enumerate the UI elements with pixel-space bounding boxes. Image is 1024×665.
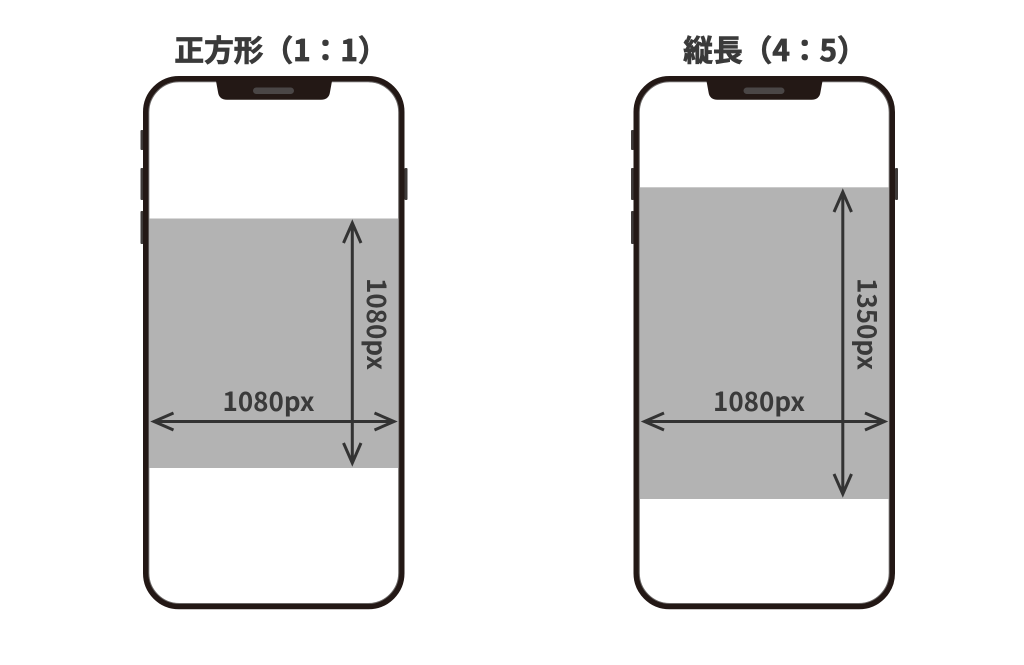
label: height 1080px: 1080px bbox=[359, 278, 396, 370]
arrow: vertical 1080px bbox=[344, 223, 361, 463]
arrow: horizontal 1080px bbox=[644, 413, 884, 430]
arrow: vertical 1350px bbox=[834, 192, 852, 494]
phone: square format bbox=[140, 79, 408, 606]
label: width 1080px: 1080px bbox=[713, 382, 805, 419]
label: width 1080px: 1080px bbox=[222, 382, 315, 419]
arrow: horizontal 1080px bbox=[154, 413, 394, 430]
label: height 1350px: 1350px bbox=[850, 278, 886, 370]
crop area: 1:1 bbox=[149, 218, 398, 468]
phone: portrait format bbox=[631, 79, 898, 606]
title: portrait: 縦長（4：5） bbox=[683, 27, 867, 70]
title: square: 正方形（1：1） bbox=[174, 27, 388, 70]
crop area: 4:5 bbox=[640, 187, 889, 499]
